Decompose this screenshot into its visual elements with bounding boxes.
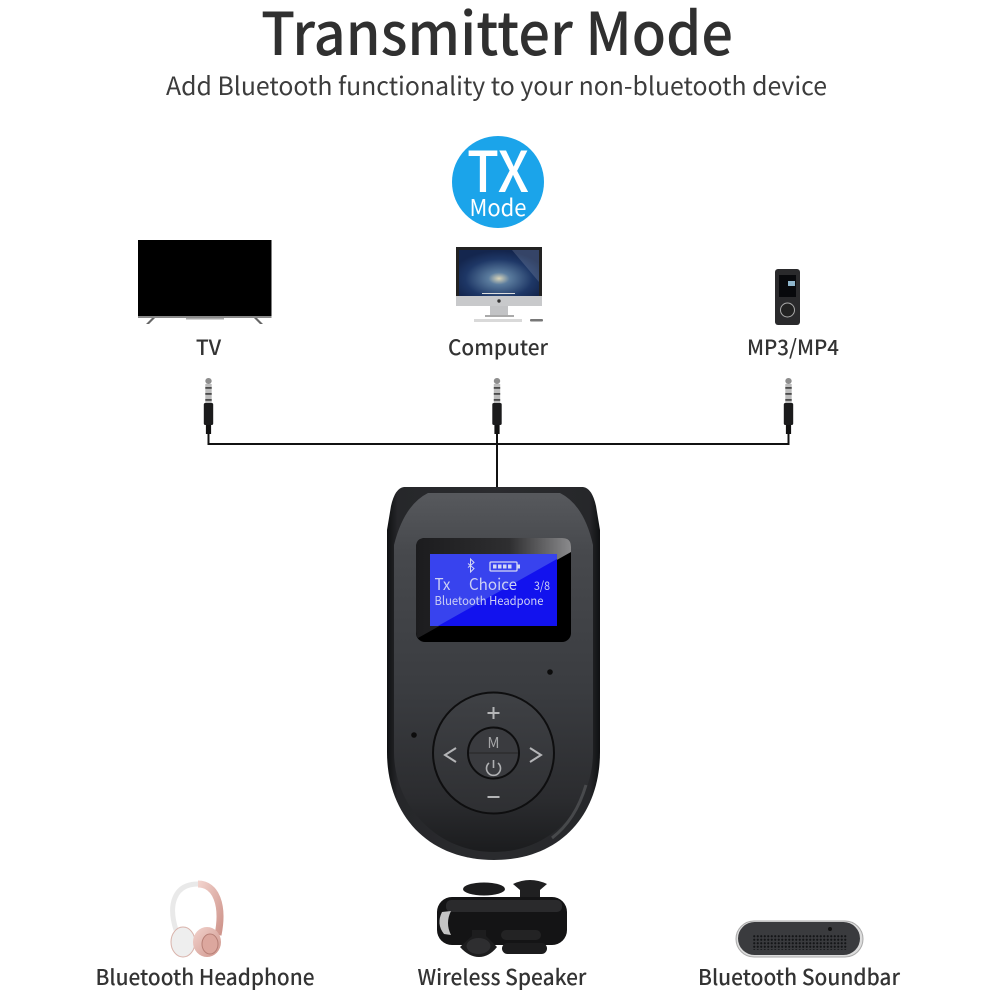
screen (416, 538, 571, 642)
badge: TX Mode: Mode (470, 189, 526, 223)
status icons (468, 559, 520, 572)
badge: TX Mode (452, 128, 544, 228)
label: MP3/MP4: MP3/MP4 (747, 332, 839, 362)
icon: headphones (171, 884, 221, 957)
subtitle: Add Bluetooth functionality to your non-bluetooth device (166, 67, 827, 103)
screen: Bluetooth Headpone (434, 592, 544, 609)
control pad: M (487, 732, 500, 753)
jack: left (204, 378, 213, 434)
icon: MP3 player (775, 269, 800, 325)
label: Bluetooth Soundbar: Bluetooth Soundbar (698, 961, 900, 992)
infographic (98, 8, 900, 990)
icon: TV (138, 240, 272, 324)
indicator holes (411, 669, 553, 738)
icon: soundbar (736, 921, 863, 957)
icon: computer (456, 247, 543, 322)
jack: centre (492, 378, 502, 434)
badge: TX Mode: TX (467, 128, 529, 209)
LCD text: Tx (434, 571, 451, 595)
jack: right (784, 378, 793, 434)
screen: Choice (469, 571, 517, 595)
label: TV: TV (196, 332, 222, 362)
audio cables (204, 378, 793, 488)
icon: wireless speaker (437, 880, 567, 957)
device: Bluetooth transmitter (387, 487, 600, 860)
label: Bluetooth Headphone: Bluetooth Headphone (96, 961, 314, 992)
control pad (433, 692, 554, 814)
label: wireless speaker: Wireless Speaker (418, 961, 587, 992)
screen: 3/8 (534, 577, 550, 594)
edge highlight (552, 785, 586, 838)
label: computer: Computer (448, 332, 548, 362)
